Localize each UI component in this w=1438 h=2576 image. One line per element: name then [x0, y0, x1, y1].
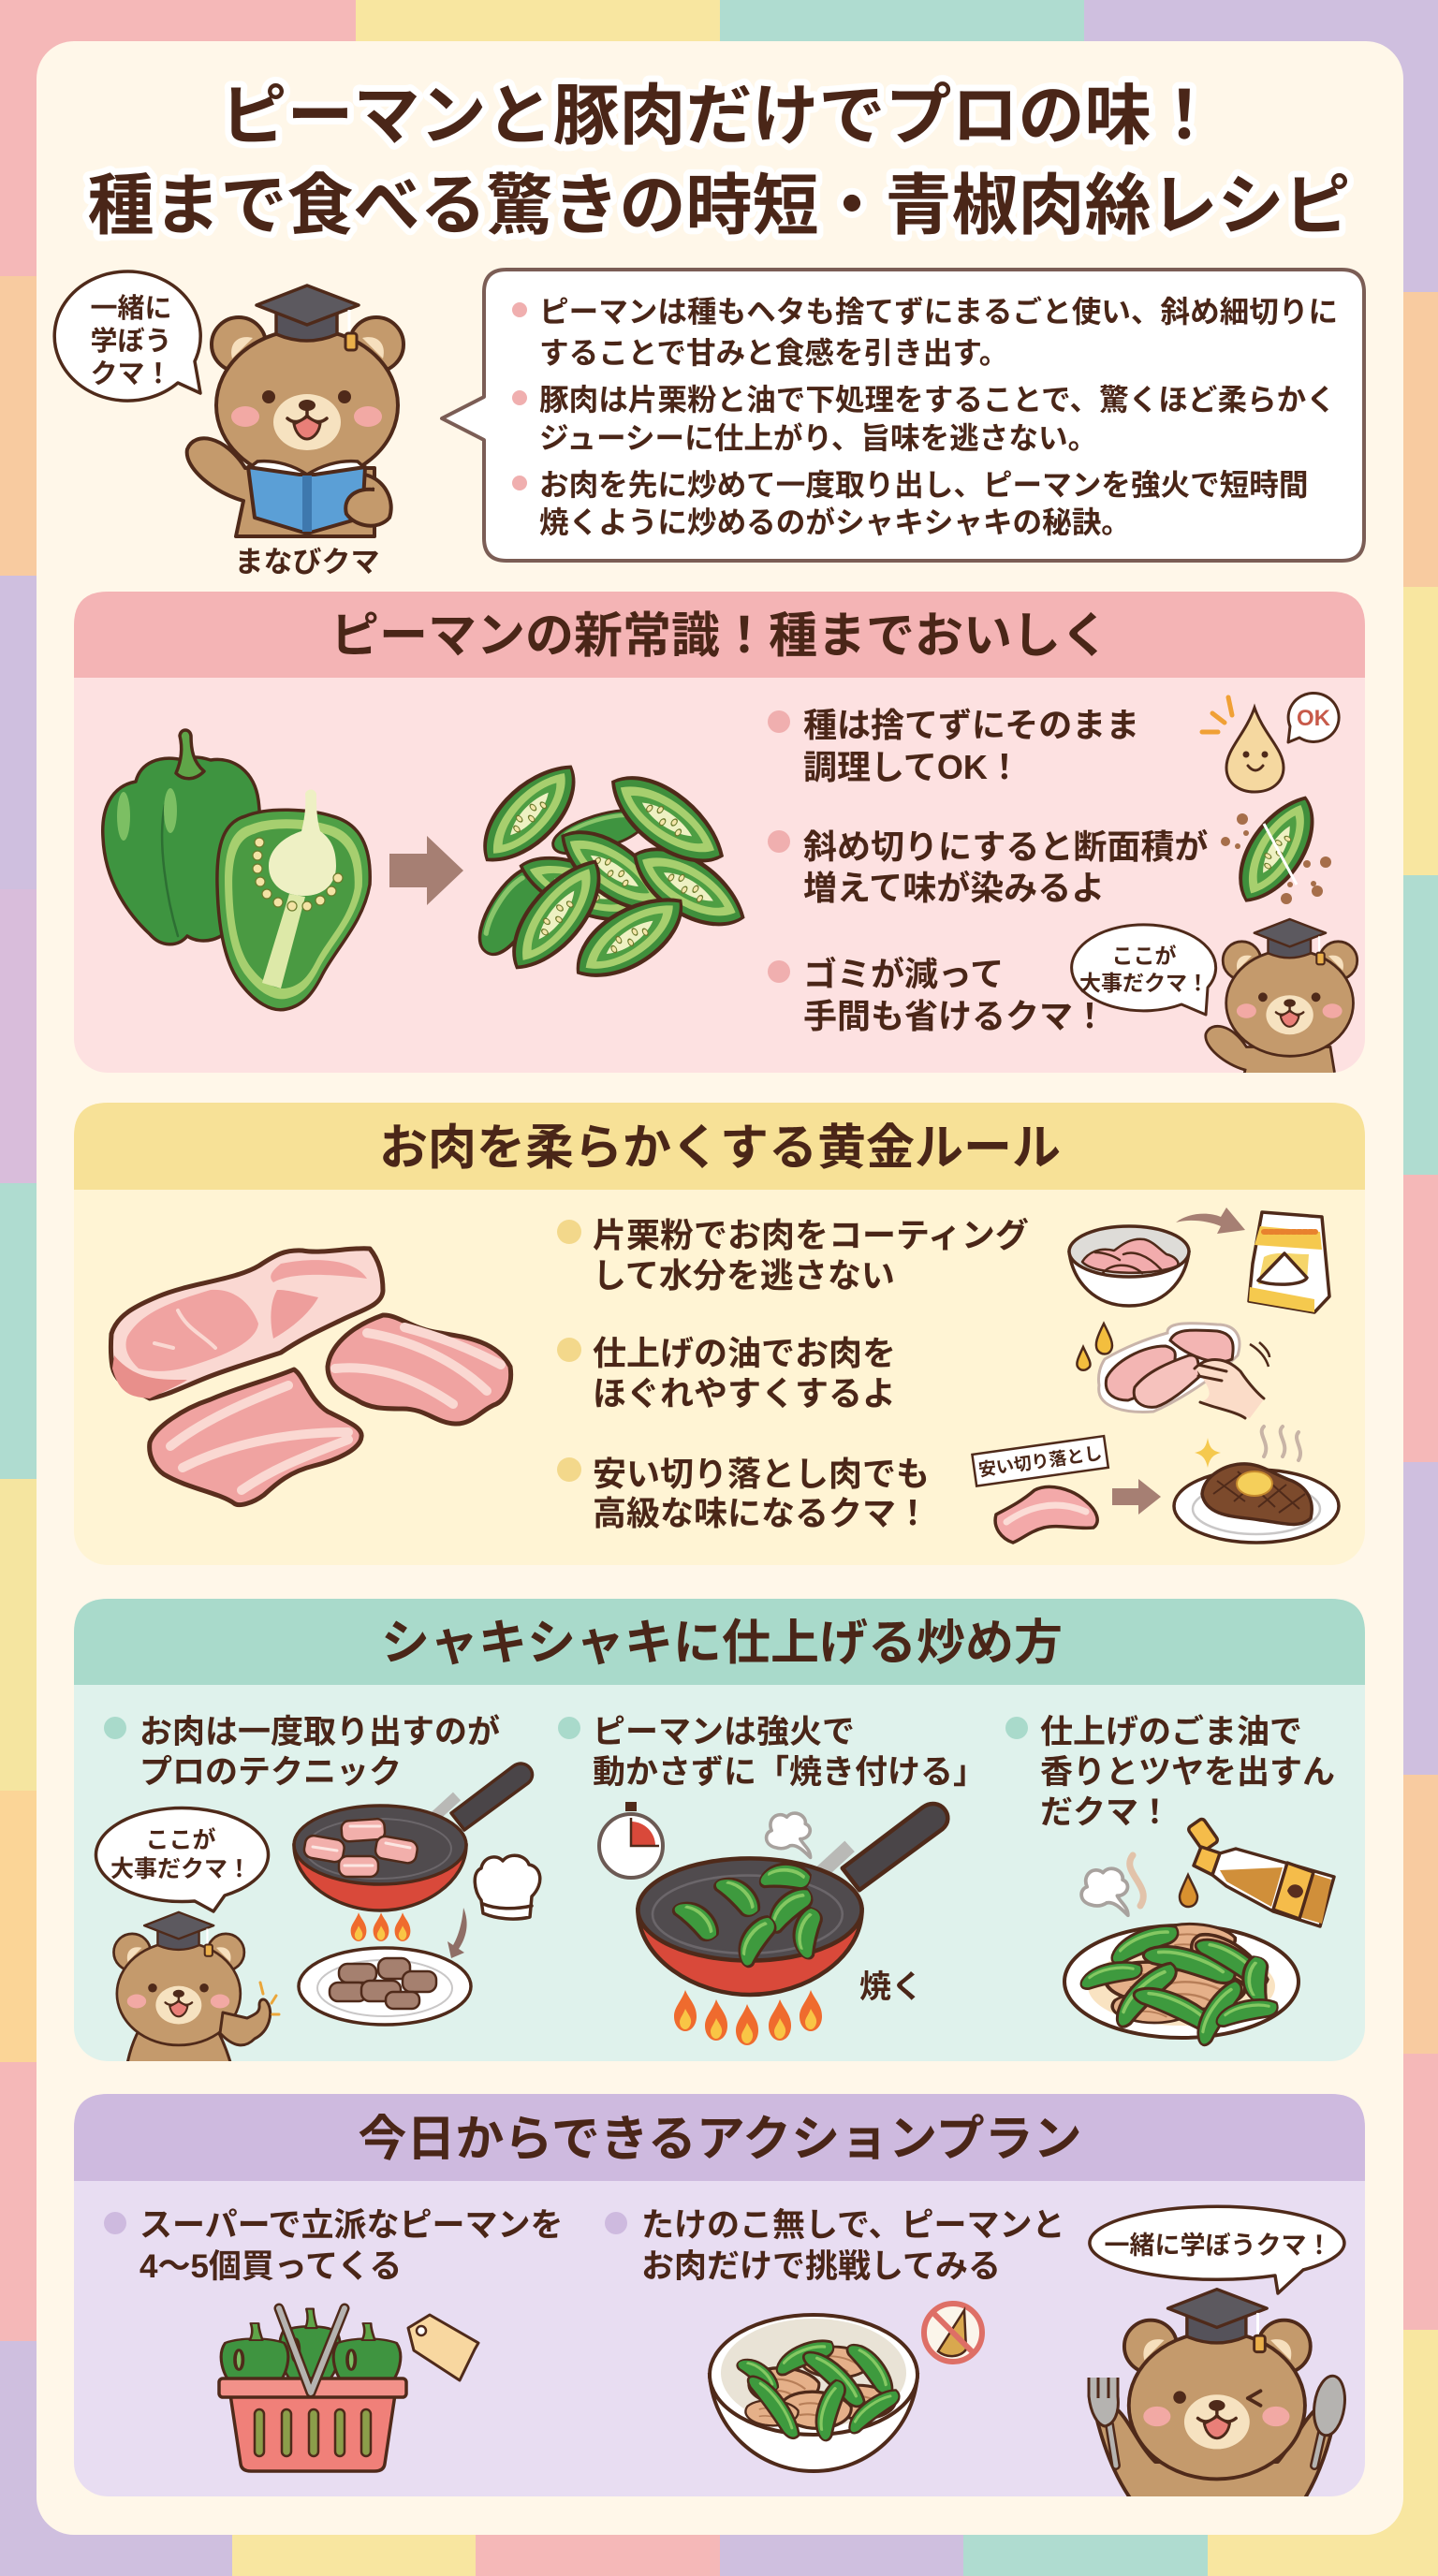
- panel: tender meat: [74, 1103, 1365, 1565]
- bullet: no bamboo shoots: たけのこ無しで、ピーマンと: [641, 2207, 1065, 2244]
- section heading: pepper: [74, 592, 1365, 678]
- icon: cut pepper with seasoning: [1221, 786, 1331, 913]
- title: [87, 80, 1351, 243]
- panel: crisp stir fry: [74, 1599, 1365, 2069]
- speech bubble: important: ここが: [1112, 944, 1176, 968]
- speech bubble: invitation: クマ！: [90, 359, 172, 389]
- speech bubble: important: ここが: [145, 1826, 216, 1853]
- bullet: sesame oil: 仕上げのごま油で: [1040, 1714, 1302, 1750]
- speech bubble: important: 大事だクマ！: [1079, 971, 1209, 995]
- icon: fork: [1089, 2378, 1118, 2466]
- icon: bowl of stir fry: [710, 2315, 917, 2471]
- mascot bear waving: [1206, 919, 1357, 1095]
- icon: large pork slices: [110, 1249, 511, 1505]
- bullet: cheap cuts: 高級な味になるクマ！: [593, 1494, 930, 1532]
- section heading: stir fry: シャキシャキに仕上げる炒め方: [381, 1617, 1063, 1671]
- mascot bear with fork and spoon: [1095, 2288, 1333, 2496]
- bullet: finishing oil: ほぐれやすくするよ: [593, 1374, 896, 1412]
- arrow: pepper to slices: [389, 836, 463, 905]
- bullet: high heat: 動かさずに「焼き付ける」: [593, 1754, 986, 1791]
- title: ピーマンと豚肉だけでプロの味！: [220, 80, 1218, 154]
- summary panel: することで甘みと食感を引き出す。: [539, 336, 1008, 370]
- summary panel: [442, 270, 1364, 561]
- speech bubble: learn together: 一緒に学ぼうクマ！: [1105, 2232, 1331, 2260]
- bullet: starch coating: [557, 1216, 1029, 1295]
- icon: smiling seed: OK: [1297, 706, 1331, 731]
- icon: finished stir fry plate: [1064, 1922, 1299, 2047]
- label tag: cheap cut: 安い切り落とし: [977, 1443, 1104, 1481]
- arrow: pan to plate: [448, 1908, 467, 1958]
- icon: potato starch bag: [1249, 1212, 1329, 1312]
- section heading: meat: [74, 1103, 1365, 1190]
- icon: oiled meat and hand: [1077, 1324, 1269, 1418]
- bullet: seeds ok: 種は捨てずにそのまま: [803, 706, 1139, 744]
- speech bubble: invitation: [54, 271, 200, 401]
- summary panel: ピーマンは種もヘタも捨てずにまるごと使い、斜め細切りに: [539, 295, 1338, 329]
- label tag: cheap cut: [972, 1436, 1108, 1486]
- bullet: sesame oil: だクマ！: [1040, 1794, 1171, 1831]
- section heading: meat: お肉を柔らかくする黄金ルール: [379, 1121, 1061, 1176]
- bullet: less waste: ゴミが減って: [803, 955, 1004, 993]
- bullet: diagonal cut: 斜め切りにすると断面積が: [803, 827, 1208, 866]
- bullet: buy peppers: スーパーで立派なピーマンを: [139, 2207, 564, 2244]
- icon: steam: [767, 1813, 811, 1857]
- bullet: cheap cuts: [557, 1455, 930, 1532]
- summary panel: ジューシーに仕上がり、旨味を逃さない。: [539, 421, 1097, 455]
- bullet: diagonal cut: [768, 827, 1208, 907]
- bullet: remove meat: お肉は一度取り出すのが: [139, 1714, 500, 1750]
- bullet: no bamboo shoots: [605, 2207, 1065, 2285]
- bullet: starch coating: 片栗粉でお肉をコーティング: [593, 1216, 1029, 1254]
- speech bubble: invitation: 一緒に: [90, 293, 172, 324]
- arrow: cheap to premium: [1112, 1479, 1161, 1515]
- mascot bear thumbs up: [113, 1912, 279, 2069]
- icon: price tag: [408, 2315, 478, 2380]
- icon: aroma steam: [1081, 1855, 1143, 1915]
- mascot bear with book: [187, 285, 404, 536]
- bullet: seeds ok: [768, 706, 1139, 786]
- mascot name: まなびクマ: [234, 546, 380, 578]
- bullet: finishing oil: 仕上げの油でお肉を: [593, 1334, 896, 1372]
- icon: flames large: [674, 1990, 822, 2045]
- speech bubble: invitation: 学ぼう: [90, 326, 172, 357]
- summary panel: お肉を先に炒めて一度取り出し、ピーマンを強火で短時間: [539, 468, 1308, 502]
- icon: plate of cooked pork: [299, 1948, 471, 2025]
- speech bubble: important: [96, 1808, 269, 1911]
- icon: pan with green peppers: [638, 1804, 947, 1995]
- speech bubble: important: [1072, 925, 1216, 1015]
- icon: thin pork cut: [995, 1486, 1097, 1543]
- speech bubble: important: 大事だクマ！: [110, 1856, 251, 1882]
- panel: action plan: [74, 2094, 1365, 2496]
- bullet: buy peppers: [104, 2207, 564, 2285]
- bullet: starch coating: して水分を逃さない: [593, 1256, 895, 1295]
- bullet: seeds ok: 調理してOK！: [803, 748, 1021, 786]
- bullet: cheap cuts: 安い切り落とし肉でも: [593, 1455, 930, 1493]
- icon: whole green pepper: [103, 730, 259, 944]
- bullet: remove meat: [104, 1714, 500, 1791]
- section heading: pepper: ピーマンの新常識！種までおいしく: [330, 609, 1109, 664]
- icon: pan with pork: [294, 1764, 533, 1910]
- bullet: less waste: [768, 955, 1107, 1035]
- summary panel: 豚肉は片栗粉と油で下処理をすることで、驚くほど柔らかく: [539, 383, 1336, 417]
- bullet: less waste: 手間も省けるクマ！: [803, 997, 1107, 1035]
- bullet: high heat: [558, 1714, 986, 1791]
- icon: bowl of meat: [1069, 1226, 1189, 1306]
- bullet: remove meat: プロのテクニック: [139, 1754, 402, 1791]
- section heading: action plan: [74, 2094, 1365, 2181]
- icon: stopwatch: [599, 1802, 663, 1878]
- icon: chef hat: [475, 1855, 540, 1919]
- speech bubble: learn together: [1090, 2206, 1344, 2293]
- title: 種まで食べる驚きの時短・青椒肉絲レシピ: [87, 169, 1351, 243]
- icon: flames small: [351, 1912, 410, 1941]
- bullet: sesame oil: [1005, 1714, 1335, 1831]
- icon: no bamboo shoot: [924, 2304, 982, 2362]
- icon: halved green pepper: [217, 790, 370, 1010]
- icon: sliced pepper pile: [466, 752, 755, 992]
- arrow: bowl to starch bag: [1176, 1208, 1245, 1234]
- summary panel: 焼くように炒めるのがシャキシャキの秘訣。: [539, 505, 1131, 539]
- section heading: stir fry: [74, 1599, 1365, 1685]
- icon: smiling seed: [1202, 693, 1339, 792]
- section heading: action plan: 今日からできるアクションプラン: [358, 2113, 1082, 2167]
- panel: pepper seeds: [74, 592, 1365, 1095]
- bullet: diagonal cut: 増えて味が染みるよ: [803, 869, 1105, 907]
- icon: sesame oil bottle: [1187, 1818, 1334, 1926]
- label: sear: 焼く: [859, 1969, 923, 2005]
- bullet: buy peppers: 4～5個買ってくる: [139, 2248, 402, 2285]
- bullet: sesame oil: 香りとツヤを出すん: [1040, 1754, 1335, 1791]
- icon: steak on plate: [1174, 1427, 1339, 1543]
- icon: shopping basket with peppers: [219, 2308, 406, 2471]
- bullet: high heat: ピーマンは強火で: [593, 1714, 855, 1750]
- bullet: no bamboo shoots: お肉だけで挑戦してみる: [641, 2248, 1001, 2285]
- bullet: finishing oil: [557, 1334, 896, 1412]
- icon: spoon: [1311, 2374, 1348, 2466]
- icon: oil drop: [1180, 1875, 1197, 1907]
